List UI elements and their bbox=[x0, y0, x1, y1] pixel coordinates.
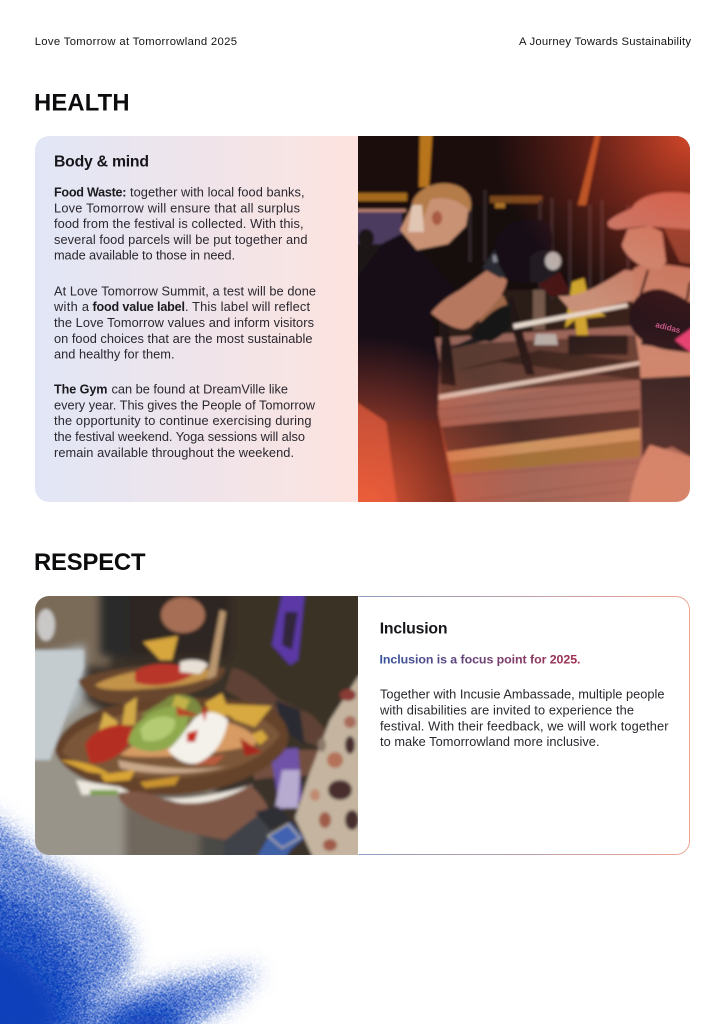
heading: health: HEALTH bbox=[34, 90, 130, 116]
panel title: Body & mind bbox=[54, 154, 149, 170]
decorative blue spray bbox=[0, 808, 262, 1024]
header right: A Journey Towards Sustainability bbox=[519, 36, 691, 48]
text block: food value label: At Love Tomorrow Summit, a test will be done bbox=[54, 283, 316, 298]
text block: the gym: every year. This gives the People of Tomorrow bbox=[54, 397, 316, 412]
text block: food value label: . This label will reflect bbox=[185, 299, 310, 314]
photo: plate of nachos bbox=[35, 596, 358, 855]
header left: Love Tomorrow at Tomorrowland 2025 bbox=[35, 36, 237, 48]
text block: food waste: food from the festival is collected. With this, bbox=[54, 216, 304, 231]
highlighted statement: Inclusion is a focus point for 2025. bbox=[380, 652, 580, 666]
text block: inclusion details bbox=[379, 687, 669, 749]
text block: food waste: made available to those in need. bbox=[54, 248, 235, 263]
text block: the gym: can be found at DreamVille like bbox=[112, 382, 288, 396]
text block: food value label: on food choices that are the most sustainable bbox=[54, 331, 312, 346]
text block: food waste: several food parcels will be put together and bbox=[54, 232, 308, 247]
text block: inclusion details: Together with Incusie Ambassade, multiple people bbox=[380, 687, 664, 702]
text block: food value label bbox=[53, 283, 316, 362]
text block: food value label: the Love Tomorrow values and inform visitors bbox=[54, 315, 314, 330]
text block: the gym: the opportunity to continue exercising during bbox=[54, 413, 312, 428]
text block: the gym: The Gym bbox=[54, 382, 108, 396]
text block: the gym: the festival weekend. Yoga sessions will also bbox=[54, 429, 305, 444]
text block: food waste bbox=[54, 184, 308, 263]
panel background bbox=[35, 136, 358, 502]
text block: food value label: food value label bbox=[92, 300, 185, 314]
text block: food value label: with a bbox=[53, 299, 90, 314]
text block: food waste: together with local food banks, bbox=[130, 184, 304, 200]
panel outline bbox=[358, 596, 690, 854]
text block: food waste: Food Waste: bbox=[54, 186, 126, 200]
text block: inclusion details: to make Tomorrowland more inclusive. bbox=[380, 734, 600, 749]
panel: body and mind bbox=[35, 136, 358, 502]
heading: respect: RESPECT bbox=[34, 549, 146, 576]
text block: the gym bbox=[54, 382, 316, 460]
photo: boxing training at the gym bbox=[358, 136, 690, 502]
panel: inclusion bbox=[358, 596, 690, 854]
brand mark on glove: adidas bbox=[655, 320, 682, 335]
text block: food value label: and healthy for them. bbox=[54, 346, 174, 362]
text block: inclusion details: festival. With their feedback, we will work together bbox=[380, 718, 669, 734]
panel title: Inclusion bbox=[380, 620, 448, 637]
text block: inclusion details: with disabilities are invited to experience the bbox=[379, 702, 634, 718]
text block: food waste: Love Tomorrow will ensure that all surplus bbox=[54, 200, 300, 215]
text block: the gym: remain available throughout the weekend. bbox=[54, 445, 294, 460]
